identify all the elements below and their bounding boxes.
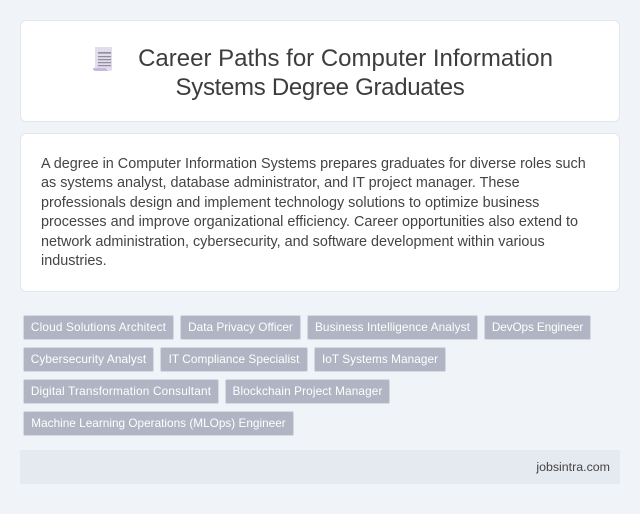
text block: description: processes and improve organizational efficiency. Career opportunities also extend to (41, 214, 578, 230)
tag: Business Intelligence Analyst (315, 320, 470, 334)
text block: description: as systems analyst, database administrator, and IT project manager. These (41, 175, 520, 191)
icon: scroll document (93, 47, 112, 71)
title: Career Paths for Computer Information (138, 45, 553, 72)
tag: Data Privacy Officer (188, 320, 293, 334)
tag (307, 315, 478, 340)
tag: Blockchain Project Manager (232, 384, 382, 398)
tag (23, 411, 294, 436)
tag (23, 347, 154, 372)
tag (180, 315, 301, 340)
tag: Cybersecurity Analyst (31, 352, 146, 366)
tag (23, 315, 174, 340)
tag: IoT Systems Manager (322, 352, 438, 366)
tag (484, 315, 591, 340)
tag: Cloud Solutions Architect (31, 320, 166, 334)
text block: description: network administration, cybersecurity, and software development within various (41, 234, 545, 250)
tag (225, 379, 390, 404)
tag: DevOps Engineer (492, 320, 583, 334)
title: Systems Degree Graduates (176, 74, 464, 101)
text block: description: industries. (41, 253, 107, 269)
footer source text: jobsintra.com (536, 460, 610, 474)
panel: header (20, 20, 620, 122)
text block: description: professionals design and implement technology solutions to optimize business (41, 194, 539, 210)
tag: IT Compliance Specialist (169, 352, 299, 366)
text block: description (41, 156, 586, 269)
tag (23, 379, 219, 404)
tag: Machine Learning Operations (MLOps) Engineer (31, 416, 286, 430)
footer bar (20, 450, 620, 484)
text block: description: A degree in Computer Information Systems prepares graduates for diverse roles such (41, 156, 586, 172)
title (138, 45, 553, 101)
panel: description (20, 133, 620, 292)
tag list: career roles (23, 315, 591, 436)
tag (314, 347, 446, 372)
tag (160, 347, 308, 372)
tag: Digital Transformation Consultant (31, 384, 211, 398)
